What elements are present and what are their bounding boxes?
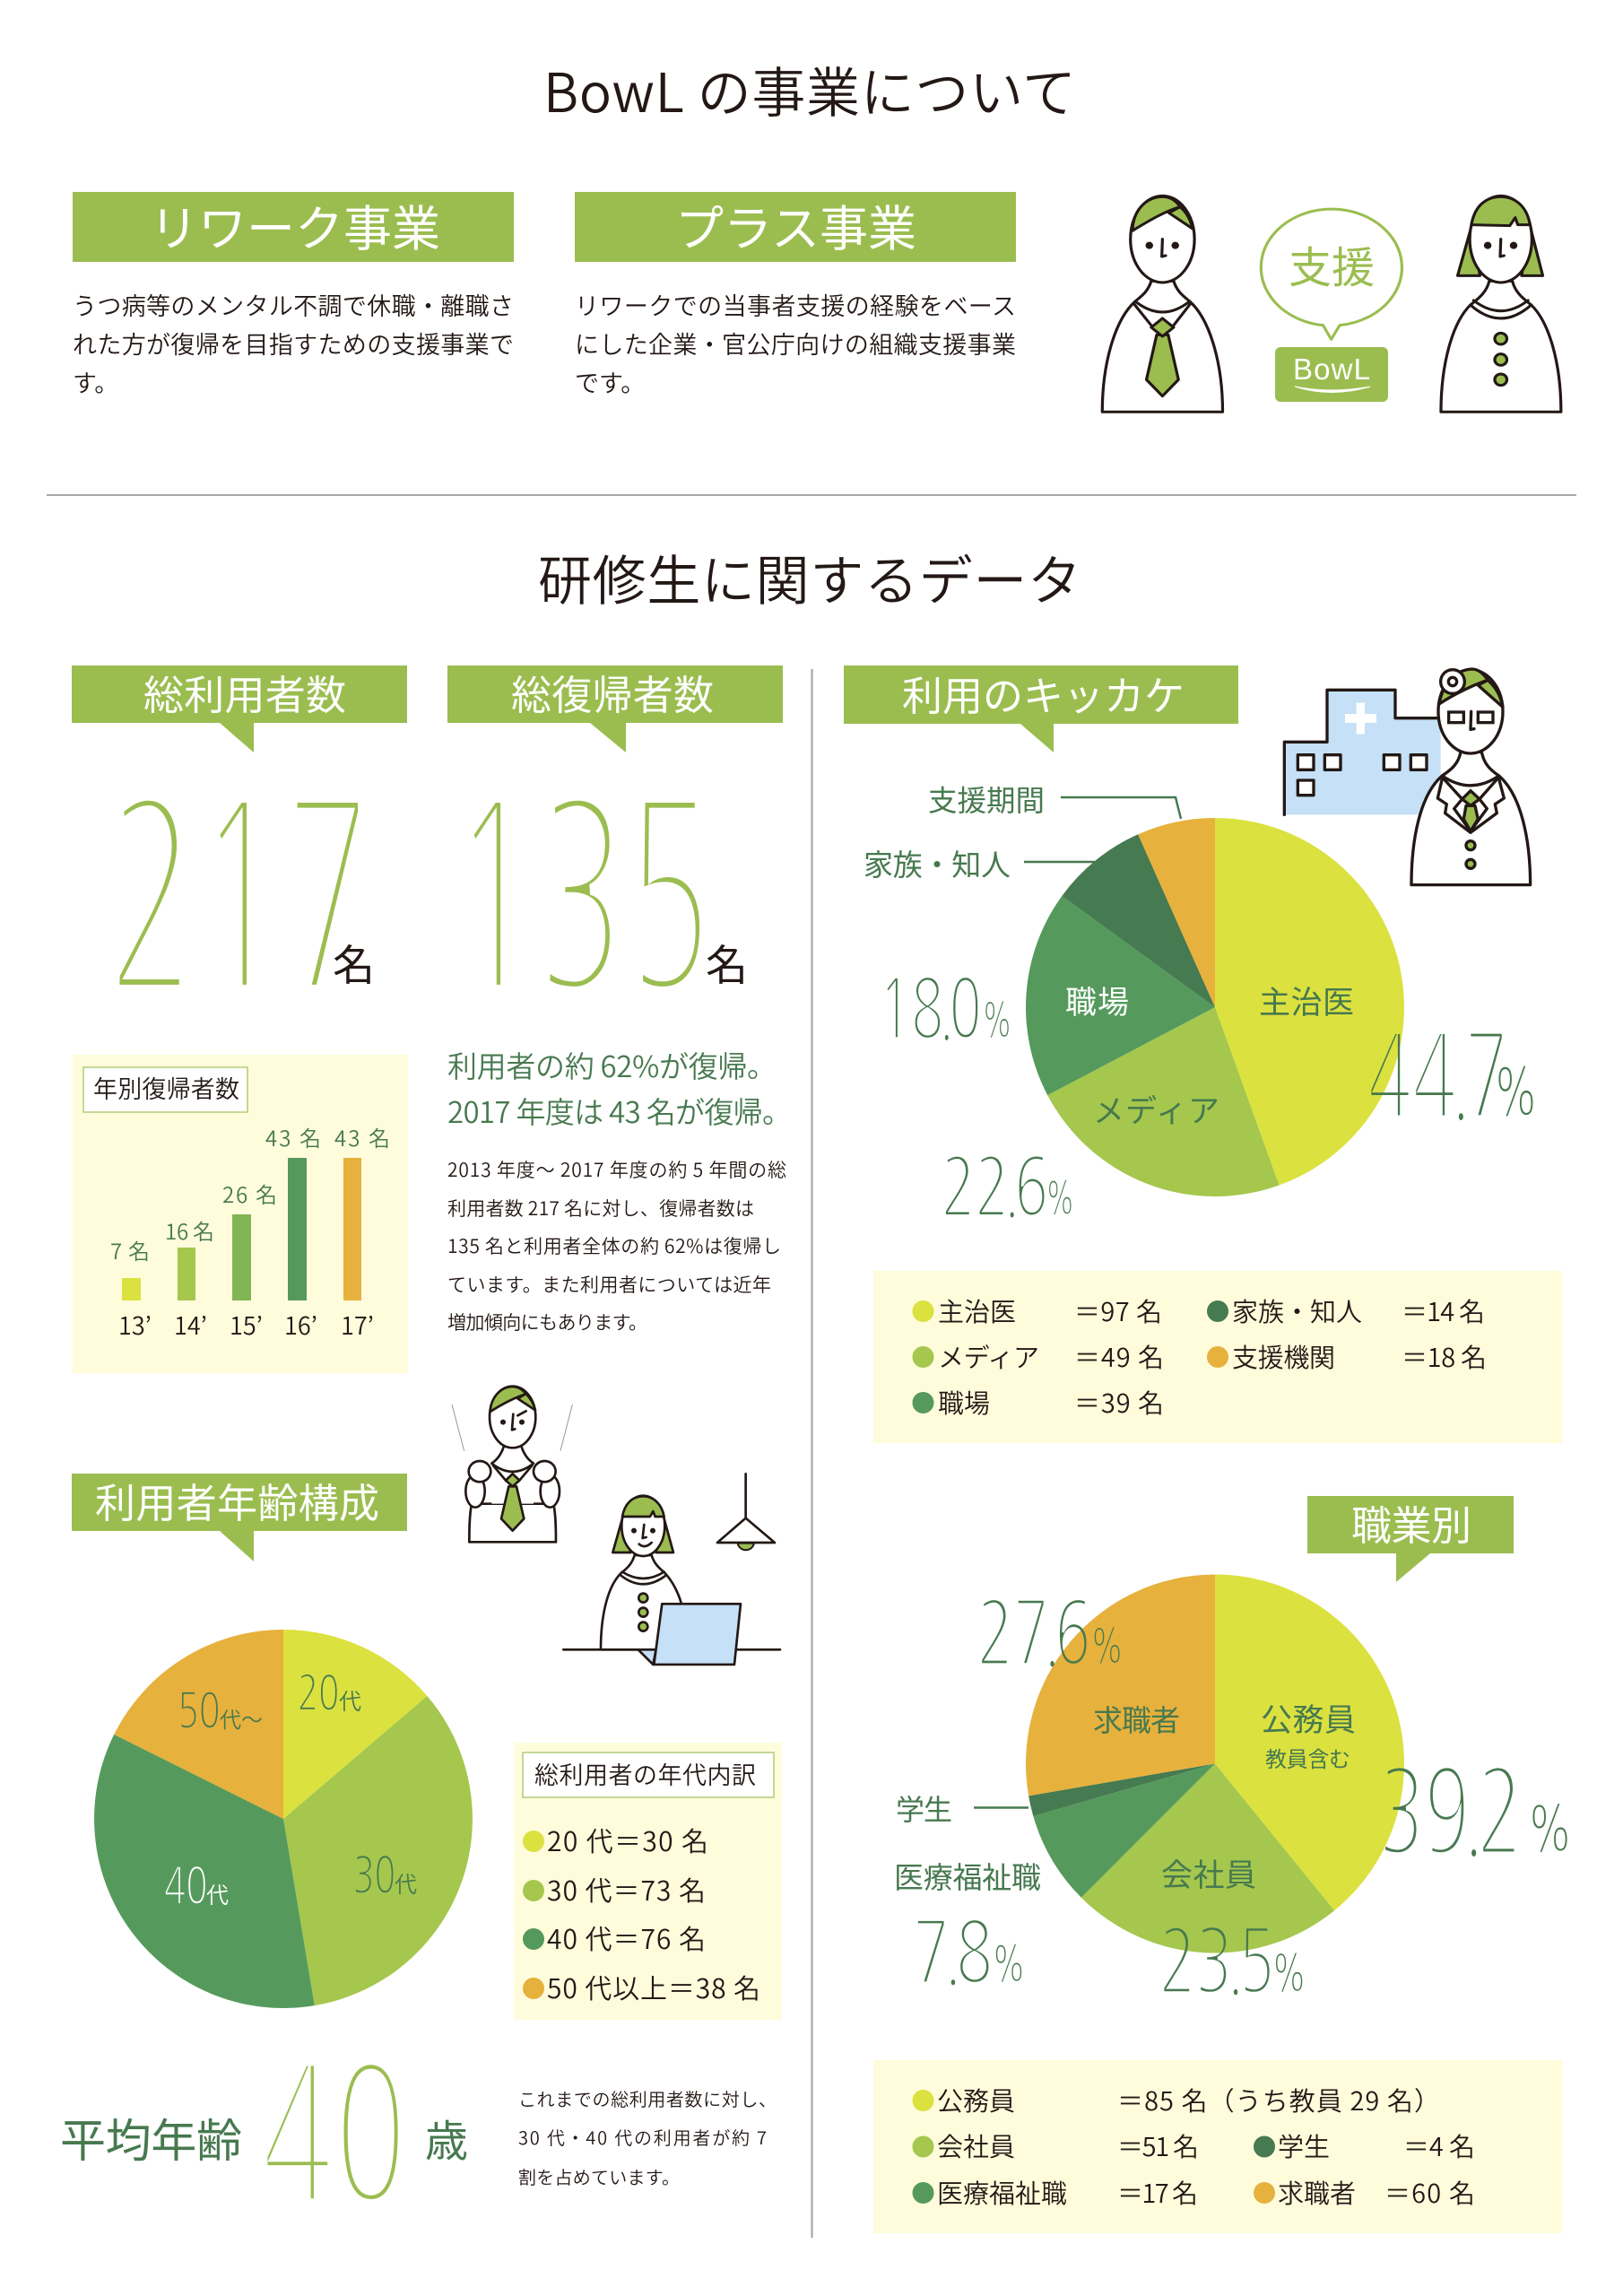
legend: reasons: ＝18 名 bbox=[1402, 1337, 1487, 1375]
text block: 復帰 description: 利用者数 217 名に対し、復帰者数は bbox=[447, 1195, 754, 1222]
callout: 約62%が復帰: 利用者の約 62%が復帰。 bbox=[447, 1043, 777, 1086]
pie label: 50代〜: 50 bbox=[178, 1686, 221, 1735]
legend: age breakdown: 40 代＝76 名 bbox=[547, 1918, 706, 1957]
text block: 復帰 description: 2013 年度～ 2017 年度の約 5 年間の総 bbox=[447, 1156, 786, 1183]
legend: reasons: 支援機関 bbox=[1232, 1337, 1335, 1375]
pie label: 40代 bbox=[164, 1862, 229, 1911]
bars bbox=[122, 1158, 361, 1300]
legend: reasons: メディア bbox=[938, 1337, 1039, 1375]
description: です。 bbox=[575, 364, 645, 399]
pie label: 公務員: 教員含む bbox=[1265, 1742, 1350, 1773]
pie chart: age bbox=[94, 1630, 473, 2008]
panel: 総復帰者数 bbox=[447, 663, 783, 1027]
year labels: 14’ bbox=[174, 1307, 207, 1342]
emphasis lines bbox=[452, 1405, 572, 1451]
icon: support speech bubble: 支援 bbox=[1289, 232, 1375, 295]
pie chart: reasons bbox=[1026, 818, 1404, 1196]
text block: 復帰 description: ています。また利用者については近年 bbox=[447, 1271, 771, 1298]
year labels: 17’ bbox=[341, 1307, 374, 1342]
title: BowLの事業について: BowL の事業について bbox=[543, 50, 1076, 128]
heading with tail bbox=[844, 665, 1238, 752]
pie label: 支援期間 bbox=[928, 778, 1181, 820]
unit: 名 bbox=[706, 931, 748, 993]
year labels: 13’ bbox=[118, 1307, 152, 1342]
legend: occupations bbox=[873, 2060, 1562, 2233]
pie label: 支援期間: 支援期間 bbox=[928, 778, 1045, 820]
icon: woman at laptop bbox=[563, 1496, 780, 1665]
heading bar bbox=[575, 192, 1016, 262]
panel: 総利用者数 bbox=[72, 663, 407, 1027]
legend: age breakdown: 20 代＝30 名 bbox=[547, 1820, 708, 1859]
percentage: 7.8%: % bbox=[992, 1940, 1026, 1989]
year labels: 16’ bbox=[284, 1307, 317, 1342]
pie label: メディア: メディア bbox=[1093, 1086, 1219, 1132]
pie label: 会社員: 会社員 bbox=[1161, 1850, 1256, 1896]
stat: 平均年齢40歳: 歳 bbox=[425, 2106, 468, 2169]
big number 217: 217 bbox=[108, 769, 372, 1027]
panel background bbox=[73, 1055, 408, 1373]
legend: reasons: ＝97 名 bbox=[1074, 1292, 1162, 1329]
pie label: 30代 bbox=[353, 1850, 417, 1900]
pie chart: occupations bbox=[1026, 1575, 1404, 1952]
pie label: 医療福祉職: 医療福祉職 bbox=[894, 1854, 1041, 1897]
big number 135: 135 bbox=[450, 768, 713, 1027]
heading with tail bbox=[447, 665, 783, 752]
bar values: 43 名 bbox=[265, 1121, 321, 1152]
pie label: 求職者: 求職者 bbox=[1093, 1697, 1180, 1740]
legend: occupations: 医療福祉職 bbox=[937, 2173, 1067, 2211]
legend: age breakdown: 50 代以上＝38 名 bbox=[547, 1967, 760, 2006]
pie label: 30代: 30 bbox=[353, 1850, 395, 1900]
title: 研修生に関するデータ: 研修生に関するデータ bbox=[538, 538, 1081, 616]
icon: BowL logo bbox=[1275, 347, 1388, 402]
pie label: 職場: 職場 bbox=[1065, 978, 1129, 1023]
percentage: 18.0%: 18.0 bbox=[879, 969, 982, 1051]
description: す。 bbox=[73, 364, 118, 399]
legend: reasons: 主治医 bbox=[938, 1292, 1016, 1329]
pie label: 20代: 代 bbox=[339, 1684, 361, 1717]
heading bar bbox=[73, 192, 514, 262]
icon: man with tie bbox=[1102, 196, 1223, 412]
bar values: 26 名 bbox=[222, 1178, 277, 1209]
percentage: 7.8%: 7.8 bbox=[913, 1910, 993, 1995]
legend: age breakdown bbox=[514, 1743, 782, 2020]
legend: age breakdown: 30 代＝73 名 bbox=[547, 1869, 706, 1909]
heading with tail bbox=[72, 665, 407, 752]
legend: occupations: ＝60 名 bbox=[1384, 2173, 1475, 2211]
legend: occupations: ＝51 名 bbox=[1117, 2126, 1199, 2164]
panel: 職業別 bbox=[873, 1493, 1573, 2233]
percentage: 44.7%: % bbox=[1493, 1060, 1539, 1126]
legend: reasons: ＝49 名 bbox=[1074, 1337, 1164, 1375]
panel: 年別復帰者数 bar chart bbox=[73, 1055, 408, 1373]
percentage: 27.6%: % bbox=[1090, 1622, 1124, 1671]
stat: 平均年齢40歳: 平均年齢 bbox=[60, 2104, 242, 2170]
percentage: 22.6%: % bbox=[1046, 1177, 1075, 1221]
legend: reasons: 家族・知人 bbox=[1232, 1292, 1362, 1329]
percentage: 44.7%: 44.7 bbox=[1367, 1020, 1509, 1135]
text block: 復帰 description: 増加傾向にもあります。 bbox=[447, 1309, 647, 1335]
pie label: 家族・知人: 家族・知人 bbox=[864, 841, 1011, 884]
illustration: man, support bubble, woman bbox=[1102, 196, 1561, 412]
heading text: 利用のキッカケ bbox=[902, 664, 1185, 722]
legend: reasons: 職場 bbox=[938, 1383, 990, 1421]
illustration: hospital and doctor bbox=[1284, 669, 1531, 885]
percentage: 23.5%: % bbox=[1271, 1948, 1306, 1999]
heading text: 職業別 bbox=[1351, 1493, 1471, 1552]
text block: age note: 割を占めています。 bbox=[518, 2163, 680, 2189]
text block: 復帰 description: 135 名と利用者全体の約 62%は復帰し bbox=[447, 1232, 781, 1259]
text block: age note: 30 代・40 代の利用者が約 7 bbox=[518, 2124, 767, 2150]
heading with tail bbox=[1307, 1496, 1514, 1582]
legend: reasons: ＝14 名 bbox=[1402, 1292, 1485, 1329]
description: リワークでの当事者支援の経験をベース bbox=[575, 287, 1016, 322]
legend: occupations: 学生 bbox=[1278, 2126, 1330, 2164]
pie label: 公務員 bbox=[1261, 1695, 1356, 1773]
percentage: 22.6%: 22.6 bbox=[942, 1148, 1048, 1228]
panel: 利用のキッカケ bbox=[844, 664, 1562, 1443]
percentage: 39.2%: 39.2 bbox=[1379, 1754, 1523, 1871]
legend: occupations: ＝4 名 bbox=[1403, 2126, 1475, 2164]
heading text: 利用者年齢構成 bbox=[95, 1471, 379, 1529]
icon: support speech bubble bbox=[1261, 209, 1402, 339]
legend: reasons bbox=[873, 1271, 1562, 1443]
legend: age breakdown: 総利用者の年代内訳 bbox=[534, 1756, 756, 1791]
description: うつ病等のメンタル不調で休職・離職さ bbox=[73, 287, 514, 322]
bar values: 7 名 bbox=[110, 1234, 150, 1265]
text block: age note: これまでの総利用者数に対し、 bbox=[518, 2085, 777, 2111]
icon: doctor bbox=[1411, 669, 1531, 885]
pie label: 20代 bbox=[298, 1669, 361, 1718]
pie label: 50代〜: 代～ bbox=[220, 1702, 263, 1734]
pie label: 学生: 学生 bbox=[896, 1787, 952, 1829]
legend: occupations: 公務員 bbox=[937, 2081, 1015, 2118]
pie label: 30代: 代 bbox=[395, 1867, 417, 1900]
legend: occupations: 会社員 bbox=[937, 2126, 1015, 2164]
pie label: 50代〜 bbox=[178, 1686, 263, 1735]
chart label bbox=[83, 1067, 247, 1112]
legend: occupations: 求職者 bbox=[1278, 2173, 1356, 2211]
icon: hospital bbox=[1284, 690, 1441, 814]
panel: プラス事業 bbox=[575, 189, 1016, 399]
stat: 平均年齢40歳 bbox=[60, 2041, 468, 2230]
bar values: 43 名 bbox=[334, 1121, 390, 1152]
panel: リワーク事業 bbox=[73, 189, 514, 399]
heading with tail bbox=[72, 1474, 407, 1561]
percentage: 18.0%: % bbox=[982, 996, 1012, 1045]
icon: pendant lamp bbox=[717, 1474, 775, 1550]
heading text: 総復帰者数 bbox=[511, 663, 714, 721]
pie label: 公務員: 公務員 bbox=[1261, 1695, 1356, 1741]
description: れた方が復帰を目指すための支援事業で bbox=[73, 326, 514, 361]
heading text: 総利用者数 bbox=[143, 663, 346, 721]
legend: occupations: ＝17 名 bbox=[1117, 2173, 1198, 2211]
pie label: 40代: 40 bbox=[164, 1862, 207, 1911]
year labels: 15’ bbox=[230, 1307, 263, 1342]
bar values: 16 名 bbox=[165, 1214, 214, 1246]
legend: occupations: ＝85 名（うち教員 29 名） bbox=[1117, 2081, 1440, 2118]
heading text: リワーク事業 bbox=[150, 189, 440, 260]
heading text: プラス事業 bbox=[675, 189, 916, 260]
percentage: 23.5%: 23.5 bbox=[1159, 1918, 1275, 2006]
stat: 平均年齢40歳: 40 bbox=[261, 2041, 407, 2230]
description: にした企業・官公庁向けの組織支援事業 bbox=[575, 326, 1016, 361]
unit: 名 bbox=[333, 931, 375, 993]
panel: 利用者年齢構成 bbox=[60, 1471, 782, 2230]
icon: man with fists bbox=[465, 1387, 560, 1542]
callout: 約62%が復帰: 2017 年度は 43 名が復帰。 bbox=[447, 1089, 792, 1132]
chart label: 年別復帰者数 bbox=[93, 1070, 239, 1105]
percentage: 27.6%: 27.6 bbox=[977, 1590, 1090, 1677]
pie label: 主治医: 主治医 bbox=[1259, 978, 1354, 1023]
pie label: 40代: 代 bbox=[206, 1878, 229, 1910]
illustration: man with fists and woman at laptop bbox=[452, 1387, 780, 1665]
icon: woman bbox=[1441, 196, 1561, 412]
icon: BowL logo: BowL bbox=[1293, 352, 1370, 386]
percentage: 39.2%: % bbox=[1527, 1798, 1573, 1861]
pie label: 20代: 20 bbox=[298, 1669, 339, 1718]
legend: reasons: ＝39 名 bbox=[1074, 1383, 1164, 1421]
